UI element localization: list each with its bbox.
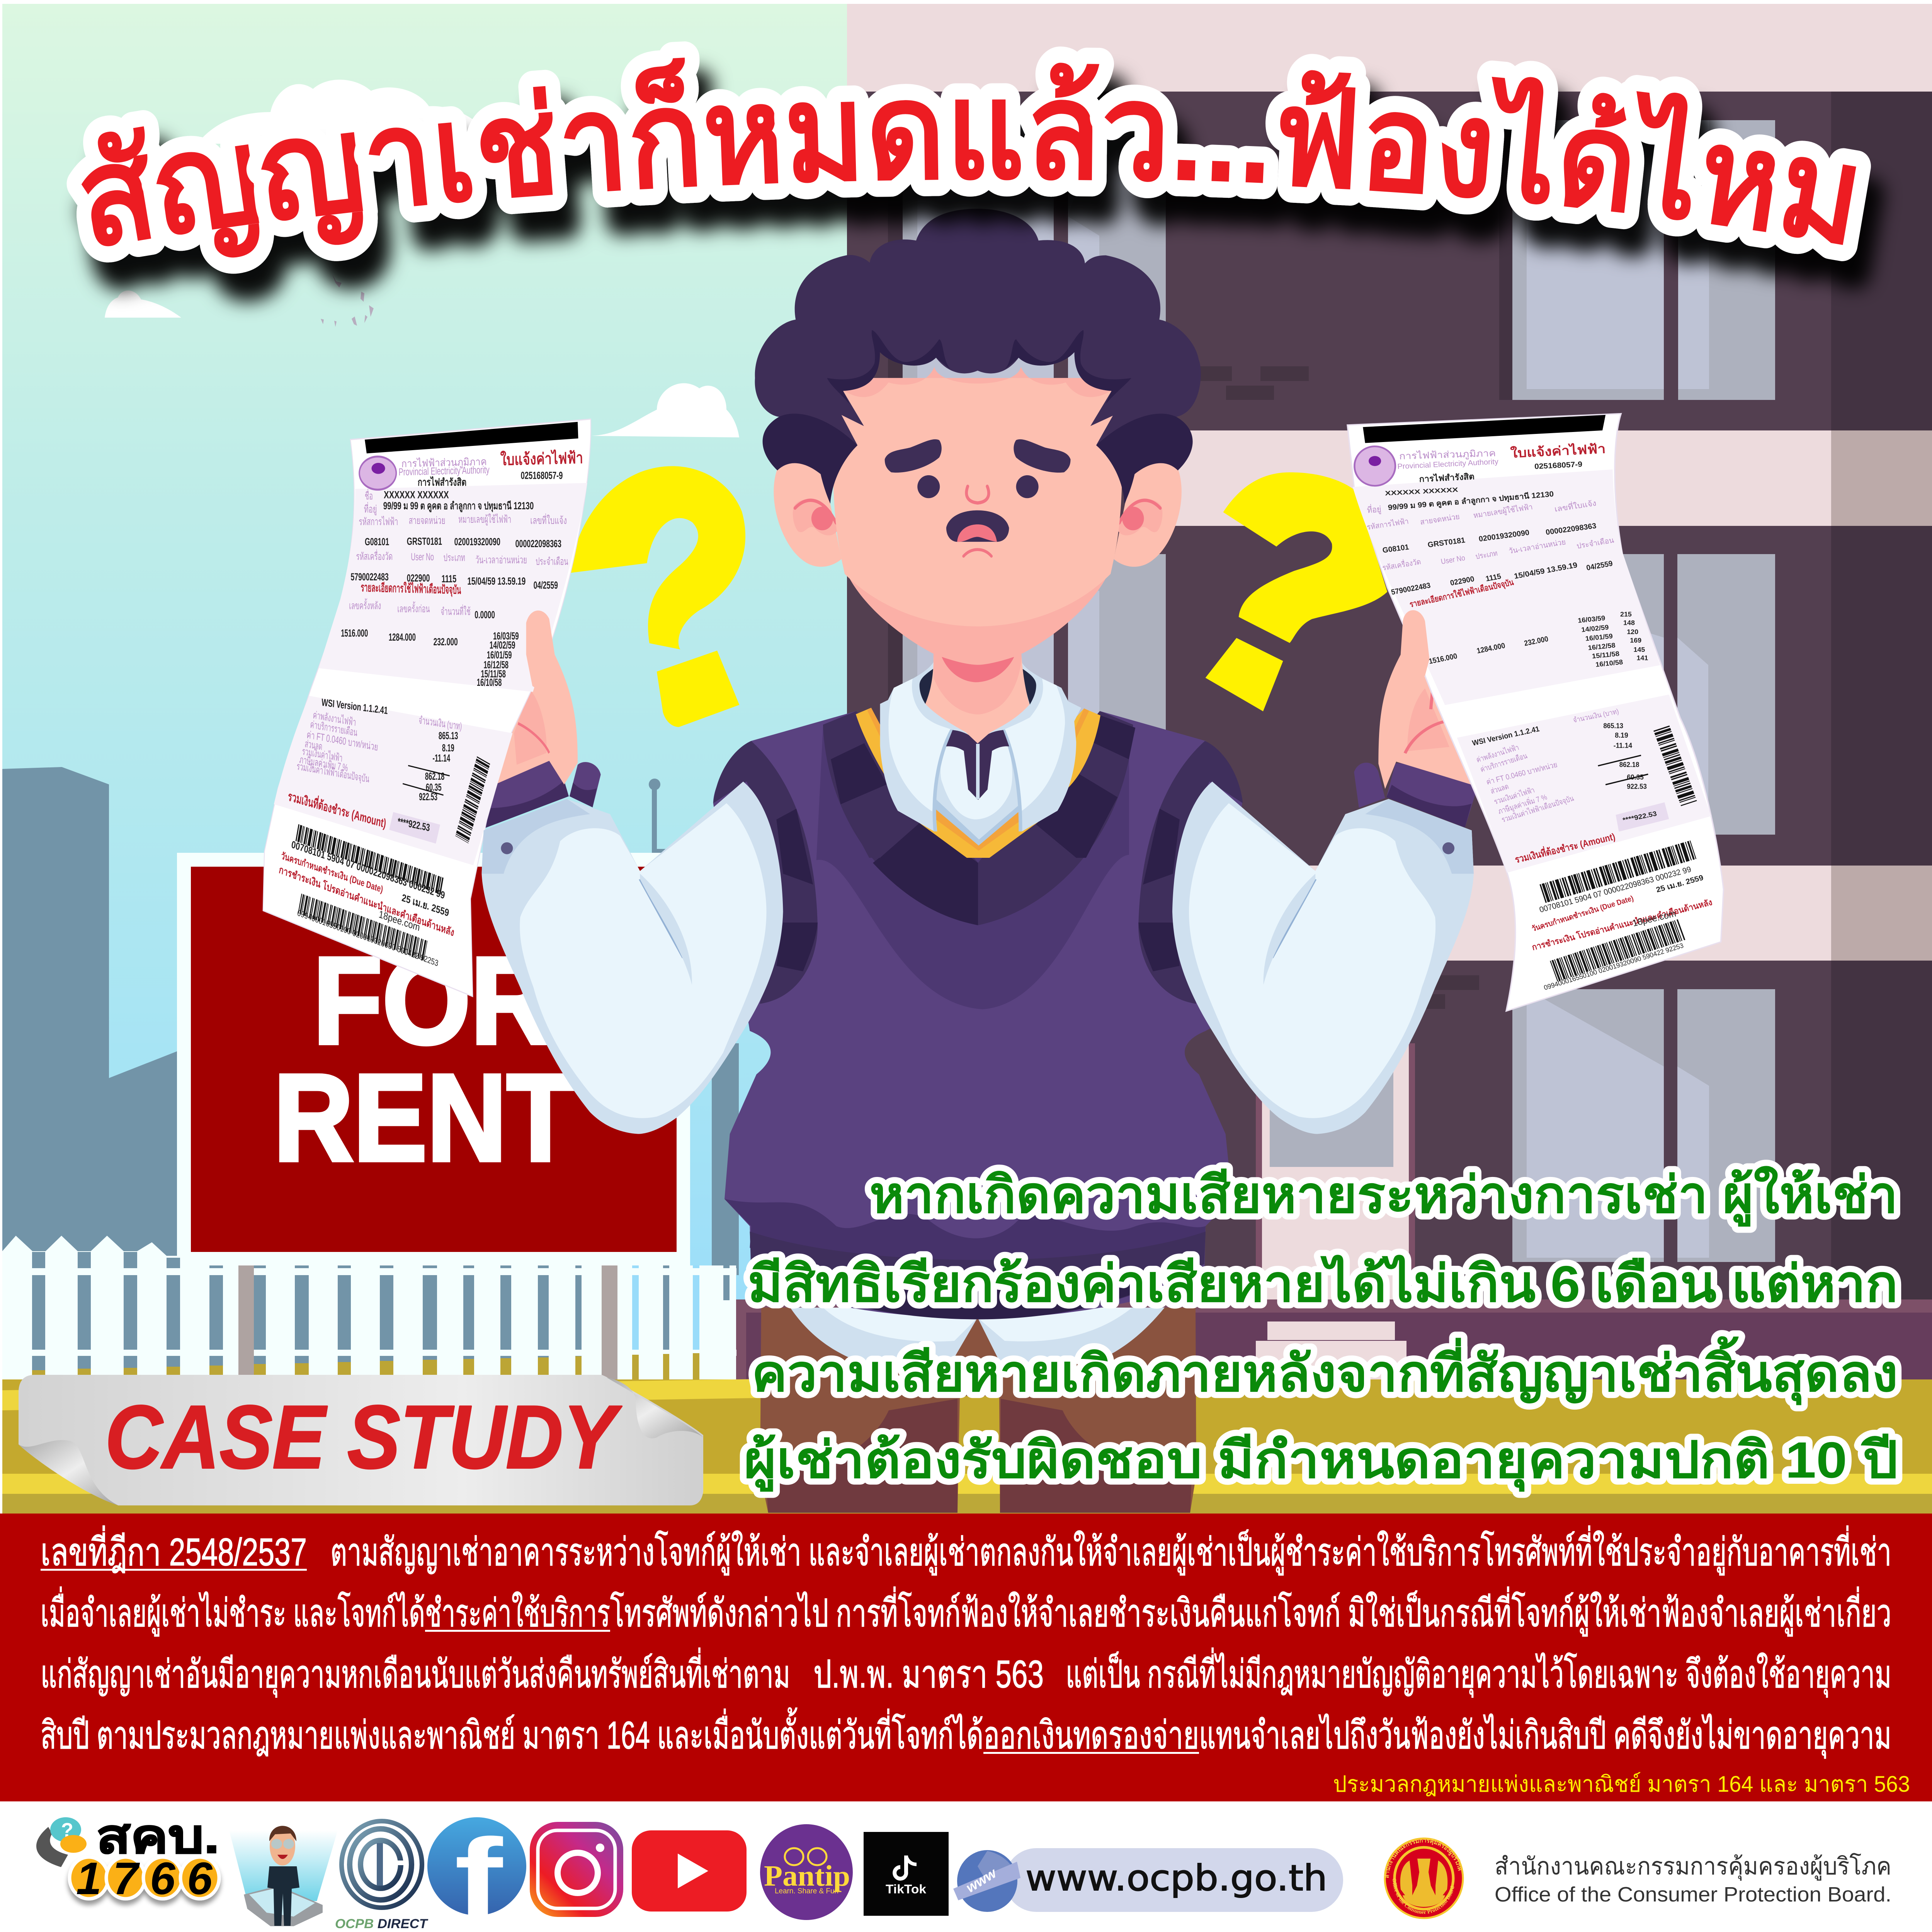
- right bill: charge details: ค่าพลังงานไฟฟ้า: [1475, 743, 1520, 764]
- hotline number: 7: [113, 1853, 140, 1904]
- left bill: charge details: ค่า FT 0.0460 บาท/หน่วย: [306, 729, 379, 753]
- man: left sleeve: [481, 782, 783, 1134]
- right bill: charge details: 922.53: [1627, 783, 1647, 791]
- building: windows: [888, 120, 1775, 1262]
- right bill: header text: สายจดหน่วย: [1420, 512, 1460, 527]
- vest stripes by collar: [831, 714, 1135, 858]
- right bill: header text: การไฟสำรังสิต: [1419, 471, 1475, 484]
- face: [833, 378, 1122, 626]
- footer icon: YouTube: [632, 1830, 747, 1912]
- legal text line 3: แก่สัญญาเช่าอันมีอายุความหกเดือนนับแต่วันส่งคืนทรัพย์สินที่เช่าตาม: [41, 1648, 790, 1698]
- left bill: header text: XXXXXX XXXXXX: [384, 489, 449, 501]
- man: trousers: [760, 1308, 1196, 1513]
- lamp post: [649, 779, 667, 854]
- left bill: header text: จำนวนที่ใช้: [441, 604, 471, 617]
- question mark: right: [1206, 472, 1387, 711]
- left thumb: [526, 611, 554, 702]
- left bill: charge details: WSI Version 1.1.2.41: [321, 696, 388, 716]
- necktie: [946, 730, 1009, 800]
- left bill: header text: 04/2559: [534, 579, 558, 591]
- left bill: charge details: -11.14: [432, 752, 450, 764]
- right bill: header text: 1516.000: [1428, 652, 1458, 666]
- left bill: charge details: ภาษีมูลค่าเพิ่ม 7 %: [299, 752, 349, 774]
- left bill: payment barcodes: วันครบกำหนดชำระเงิน (Due Date): [280, 851, 384, 895]
- left bill: header text: 232.000: [434, 636, 458, 648]
- right cuff: [1386, 763, 1478, 827]
- right bill: payment barcodes: วันครบกำหนดชำระเงิน (Due Date): [1531, 894, 1634, 933]
- left bill: header text: 16/12/58: [483, 659, 509, 670]
- building: bricks: [1199, 366, 1479, 1009]
- footer logo: OCPB direct: [335, 1821, 429, 1931]
- legal text line 4: สิบปี ตามประมวลกฎหมายแพ่งและพาณิชย์ มาตรา 164 และเมื่อนับตั้งแต่วันที่โจทก์ได้: [41, 1708, 983, 1757]
- left bill: header text: 1284.000: [389, 631, 416, 643]
- right bill: header text: 000022098363: [1545, 522, 1597, 537]
- ears: [774, 463, 842, 567]
- right bill: header text: 020019320090: [1478, 529, 1530, 543]
- right bill: payment barcodes: [1531, 850, 1713, 992]
- sign text: FOR: FOR: [313, 931, 553, 1070]
- right bill: charge details: 865.13: [1603, 722, 1623, 730]
- right bill: paper: [1347, 414, 1724, 1011]
- right bill: charge details: ภาษีมูลค่าเพิ่ม 7 %: [1497, 792, 1548, 816]
- right bill: vertical barcode: [1662, 728, 1689, 804]
- right bill: payment barcodes: 18pee.com: [1631, 908, 1677, 929]
- vest: centre shading: [816, 727, 1129, 1009]
- right bill: charge details: รวมเงินค่าไฟฟ้า: [1493, 786, 1536, 806]
- left bill: payment barcodes: [278, 833, 455, 969]
- right bill: header text: G08101: [1382, 543, 1410, 555]
- chat bubble: [60, 1835, 87, 1853]
- left bill: header text: การไฟสำรังสิต: [418, 476, 466, 488]
- man: neck, collar and necktie: [831, 657, 1135, 858]
- background: sky: [2, 4, 847, 1395]
- left bill: charge details: 922.53: [419, 791, 437, 803]
- right bill: header text: XXXXXX XXXXXX: [1385, 486, 1459, 497]
- globe: www: [963, 1864, 1000, 1896]
- right bill: header text: รายละเอียดการใช้ไฟฟ้าเดือนปัจจุบัน: [1408, 577, 1515, 610]
- right bill: header text: หมายเลขผู้ใช้ไฟฟ้า: [1473, 503, 1533, 520]
- left bill: header text: การไฟฟ้าส่วนภูมิภาค: [401, 456, 487, 470]
- left bill: header text: วัน-เวลาอ่านหน่วย: [475, 554, 527, 566]
- legal text line 1: เลขที่ฎีกา 2548/2537: [41, 1526, 307, 1574]
- emblem: ring text: Office of the Consumer Protection Board: [1391, 1878, 1456, 1915]
- left bill: header text: ใบแจ้งค่าไฟฟ้า: [500, 448, 583, 469]
- right bill: header text: รหัสการไฟฟ้า: [1366, 517, 1409, 532]
- legal text line 2: [41, 1587, 1891, 1636]
- legal text line 3: ป.พ.พ. มาตรา 563: [813, 1653, 1044, 1696]
- right bill: header text: รหัสเครื่องวัด: [1381, 556, 1422, 572]
- left bill: header text: ประเภท: [444, 551, 465, 563]
- left bill: charge details: จำนวนเงิน (บาท): [418, 714, 462, 732]
- hotline number: 6: [187, 1853, 213, 1904]
- right bill: charge details: จำนวนเงิน (บาท): [1572, 707, 1619, 724]
- question mark: left: [569, 466, 745, 727]
- legal text line 3: [41, 1648, 1891, 1698]
- left bill: header text: 1516.000: [341, 627, 368, 639]
- right bill: payment barcodes: การชำระเงิน โปรดอ่านคำแนะนำและคำเตือนด้านหลัง: [1531, 897, 1713, 952]
- left bill: header text: 16/10/58: [477, 677, 502, 688]
- footer: agency name: [1495, 1853, 1891, 1906]
- man: right hand holding electricity bill: [1347, 414, 1724, 1011]
- green summary text: มีสิทธิเรียกร้องค่าเสียหายได้ไม่เกิน 6 เดือน แต่หาก: [748, 1255, 1898, 1312]
- right bill: header text: 025168057-9: [1534, 460, 1583, 471]
- left bill: header text: รายละเอียดการใช้ไฟฟ้าเดือนปัจจุบัน: [361, 580, 461, 597]
- right bill: header text: 148: [1623, 619, 1635, 626]
- ground: [2, 1379, 1932, 1514]
- right bill: black bar: [1363, 415, 1605, 443]
- left bill: header text: รหัสการไฟฟ้า: [359, 516, 398, 527]
- jaw shadow: [842, 559, 1114, 653]
- left bill: header text: 020019320090: [454, 536, 500, 548]
- footer logo: Pantip: [760, 1824, 853, 1920]
- hotline number: [70, 1853, 219, 1904]
- left bill: charge details: 8.19: [442, 742, 454, 753]
- left bill: header text: ชื่อ: [365, 489, 373, 502]
- red legal panel: [0, 1514, 1932, 1801]
- left bill: paper: [263, 419, 591, 997]
- eyes: [917, 475, 940, 498]
- right bill: header text: 16/12/58: [1588, 641, 1616, 651]
- right bill: header text: 16/10/58: [1595, 658, 1623, 668]
- legal reference: ประมวลกฎหมายแพ่งและพาณิชย์ มาตรา 164 และ มาตรา 563: [1333, 1772, 1910, 1797]
- green summary text: ผู้เช่าต้องรับผิดชอบ มีกำหนดอายุความปกติ 10 ปี: [744, 1432, 1898, 1492]
- right bill: charge details: [1471, 707, 1648, 825]
- building: door: [1256, 1043, 1415, 1306]
- left bill: amount: [287, 787, 440, 844]
- man: right sleeve: [1172, 782, 1474, 1134]
- left bill: amount: ****922.53: [397, 815, 430, 833]
- left bill: charge details: รวมเงินค่าไฟฟ้า: [302, 745, 343, 764]
- left bill: header text: 022900: [407, 572, 430, 584]
- collar highlights: [888, 679, 952, 811]
- emblem: ring text: สำนักงานคณะกรรมการคุ้มครองผู้บริโภค: [1384, 1837, 1463, 1878]
- left bill: header text: หมายเลขผู้ใช้ไฟฟ้า: [458, 513, 511, 526]
- right bill: header text: ที่อยู่: [1367, 503, 1382, 515]
- right bill: header text: 16/03/59: [1577, 614, 1605, 624]
- building: facade: [719, 4, 1932, 1380]
- right palm: [1378, 610, 1471, 789]
- left bill: charge details: [296, 696, 462, 803]
- vest: V-neck: [823, 711, 1133, 925]
- footer logo: OCPB hotline 1766: [36, 1810, 219, 1904]
- right bill: charge details: ค่าบริการรายเดือน: [1479, 752, 1529, 774]
- case study paper banner: [19, 1375, 703, 1505]
- left bill: header text: สายจดหน่วย: [409, 515, 445, 526]
- yellow trim: [856, 708, 1100, 858]
- left bill: charge details: รวมเงินค่าไฟฟ้าเดือนปัจจุบัน: [296, 760, 370, 785]
- hotline number: 6: [150, 1853, 176, 1904]
- right bill: header text: 15/11/58: [1592, 650, 1620, 660]
- right bill: charge details: -11.14: [1614, 742, 1632, 750]
- left bill: charge details: ค่าบริการรายเดือน: [310, 718, 358, 738]
- right bill: header text: เลขที่ใบแจ้ง: [1554, 498, 1597, 514]
- legal text line 4: [41, 1708, 1891, 1759]
- left bill: charge details: ค่าพลังงานไฟฟ้า: [313, 709, 357, 728]
- neck shadow: [942, 657, 1014, 682]
- left bill: header text: G08101: [365, 536, 389, 548]
- left bill: payment barcodes: 099400016550100 020019320090 590422 92253: [297, 908, 439, 969]
- right bill: payment barcodes: 099400016550100 020019320090 590422 92253: [1543, 942, 1684, 992]
- left bill: amount: รวมเงินที่ต้องชำระ (Amount): [287, 787, 387, 830]
- legal text line 4: ออกเงินทดรองจ่าย: [983, 1714, 1199, 1757]
- footer logo: TikTok: TikTok: [886, 1882, 926, 1896]
- left bill: header text: 15/11/58: [481, 668, 506, 680]
- left bill: charge details: 862.18: [425, 770, 444, 782]
- left bill: header text: Provincial Electricity Authority: [398, 464, 490, 478]
- right bill: header text: 169: [1630, 636, 1641, 644]
- left bill: payment barcodes: 25 เม.ย. 2559: [401, 891, 450, 919]
- neck top: [934, 650, 1022, 665]
- right bill: charge details: รวมเงินค่าไฟฟ้าเดือนปัจจุบัน: [1500, 794, 1575, 825]
- right bill: header text: 15/04/59 13.59.19: [1513, 561, 1578, 581]
- legal text line 2: เมื่อจำเลยผู้เช่าไม่ชำระ และโจทก์ได้: [41, 1587, 425, 1636]
- footer: website pill: [953, 1848, 1343, 1912]
- right bill: header text: 215: [1620, 611, 1632, 618]
- left bill: header text: GRST0181: [407, 536, 442, 547]
- left bill: header text: ประจำเดือน: [536, 556, 568, 567]
- right bill: header text: 16/01/59: [1585, 632, 1613, 642]
- left bill: charge details: ส่วนลด: [304, 738, 323, 752]
- left bill: payment barcodes: การชำระเงิน โปรดอ่านคำแนะนำและคำเตือนด้านหลัง: [278, 863, 455, 938]
- left bill: header text: เลขครั้งก่อน: [397, 602, 430, 614]
- right bill: amount: รวมเงินที่ต้องชำระ (Amount): [1514, 830, 1616, 865]
- left bill: header text: 0.0000: [474, 609, 495, 621]
- right bill: charge details: ค่า FT 0.0460 บาท/หน่วย: [1485, 760, 1558, 786]
- legal text line 2: ชำระค่าใช้บริการ: [425, 1592, 610, 1635]
- right bill: header text: 1115: [1485, 572, 1502, 583]
- left bill: header text: [341, 448, 583, 688]
- right bill: charge details: ส่วนลด: [1490, 782, 1510, 796]
- forehead shadow: [843, 367, 1112, 397]
- left bill: header text: รหัสเครื่องวัด: [356, 549, 393, 562]
- right bill: header text: Provincial Electricity Authority: [1397, 457, 1498, 471]
- shirt front: [940, 746, 1012, 820]
- left bill: header text: 16/01/59: [487, 649, 512, 661]
- right bill: header text: ประจำเดือน: [1576, 536, 1615, 551]
- left bill: header text: 14/02/59: [490, 639, 515, 651]
- man: shirt tail: [790, 1308, 1165, 1364]
- footer: government emblem: [1384, 1837, 1463, 1918]
- left bill: header text: 16/03/59: [493, 630, 519, 642]
- left bill: header text: 1115: [442, 573, 457, 585]
- right bill: header text: 120: [1627, 628, 1638, 636]
- right bill: header text: ประเภท: [1475, 549, 1498, 561]
- right bill: header text: User No: [1440, 554, 1466, 566]
- emblem: ring text: [1384, 1837, 1463, 1915]
- right bill: header text: 99/99 ม 99 ต คูคต อ ลำลูกกา จ ปทุมธานี 12130: [1388, 490, 1554, 513]
- left palm: [495, 611, 578, 784]
- man: vest: [713, 711, 1243, 1319]
- right bill: payment barcodes: 25 เม.ย. 2559: [1655, 874, 1704, 894]
- left bill: header text: เลขที่ใบแจ้ง: [530, 513, 567, 526]
- emblem: pedestal and guardians: [1400, 1859, 1447, 1907]
- globe: [953, 1850, 1020, 1912]
- for rent sign: [177, 853, 690, 1270]
- question bubble: ?: [61, 1819, 73, 1842]
- left bill: black bar: [365, 422, 578, 453]
- right bill: logo: [1354, 446, 1395, 486]
- sign text: RENT: RENT: [274, 1048, 574, 1187]
- right bill: header text: ใบแจ้งค่าไฟฟ้า: [1510, 441, 1606, 461]
- footer icon: Facebook: [427, 1816, 526, 1932]
- main title: สัญญาเช่าก็หมดแล้ว...ฟ้องได้ไหม: [67, 55, 1874, 276]
- right bill: charge details: 8.19: [1615, 732, 1628, 740]
- footer logo: Pantip: Pantip: [764, 1860, 850, 1892]
- distant column right of sign: [712, 1043, 739, 1275]
- white picket fence: [2, 1236, 736, 1379]
- left bill: header text: 15/04/59 13.59.19: [467, 575, 526, 587]
- distant grey-blue building: [2, 767, 178, 1314]
- left bill: logo: [359, 457, 396, 490]
- right bill: payment barcodes: 00708101 5904 07 000022098363 000232 99: [1538, 865, 1692, 914]
- agency name: สคบ.: [96, 1810, 219, 1863]
- man: head: [755, 209, 1201, 665]
- left bill: charge details: 865.13: [439, 730, 458, 742]
- right bill: header text: 145: [1633, 646, 1645, 653]
- footer: OCPB direct presenter: [229, 1826, 338, 1926]
- right bill: header text: การไฟฟ้าส่วนภูมิภาค: [1399, 448, 1496, 462]
- website address: www.ocpb.go.th: [1026, 1857, 1327, 1899]
- left bill: charge details: 60.35: [426, 781, 442, 793]
- sideburns: [763, 413, 857, 504]
- green summary text: [744, 1166, 1898, 1492]
- footer: agency name: Office of the Consumer Protection Board.: [1495, 1883, 1891, 1906]
- right bill: header text: 5790022483: [1390, 581, 1431, 597]
- left bill: header text: ที่อยู่: [364, 502, 377, 515]
- vest: armholes: [713, 741, 818, 1004]
- right bill: header text: 141: [1636, 654, 1648, 662]
- left bill: vertical barcode: [462, 760, 483, 840]
- shirt collar: [880, 657, 1081, 842]
- right bill: header text: [1366, 441, 1648, 668]
- eyebrows: [885, 439, 942, 473]
- building: pink bands: [1151, 430, 1831, 961]
- building: plinth and steps: [719, 1299, 1932, 1380]
- right bill: header text: 022900: [1449, 575, 1475, 587]
- collar interior: [920, 668, 1036, 704]
- orange trim: [867, 708, 1089, 851]
- right bill: header text: 1284.000: [1476, 641, 1506, 655]
- case study text: CASE STUDY: [105, 1387, 622, 1487]
- phone icon: [36, 1827, 68, 1867]
- footer logo: TikTok: [864, 1832, 949, 1916]
- footer logo: Pantip: Learn. Share & Fun: [775, 1887, 838, 1895]
- left bill: header text: 025168057-9: [521, 469, 563, 481]
- left bill: header text: เลขครั้งหลัง: [349, 598, 381, 611]
- right thumb: [1403, 610, 1429, 680]
- right bill: amount: ****922.53: [1622, 810, 1658, 824]
- hotline number: 1: [76, 1853, 102, 1904]
- right bill: header text: 04/2559: [1586, 560, 1614, 572]
- right bill: header text: GRST0181: [1427, 536, 1466, 549]
- left bill: header text: 5790022483: [350, 571, 389, 583]
- left bill: payment barcodes: 18pee.com: [378, 908, 421, 933]
- question bubble: [50, 1817, 81, 1842]
- left cuff: [485, 761, 569, 828]
- green summary text: ความเสียหายเกิดภายหลังจากที่สัญญาเช่าสิ้นสุดลง: [752, 1336, 1898, 1405]
- left bill: payment barcodes: 00708101 5904 07 000022098363 000232 99: [291, 838, 446, 901]
- birds: [321, 274, 374, 327]
- left bill: header text: 99/99 ม 99 ต คูคต อ ลำลูกกา จ ปทุมธานี 12130: [383, 500, 534, 512]
- right bill: amount: [1514, 802, 1669, 865]
- mouth: [946, 510, 1009, 542]
- left bill: header text: 000022098363: [515, 538, 561, 549]
- right bill: charge details: 862.18: [1619, 761, 1639, 769]
- clouds: [105, 80, 739, 437]
- neck: [925, 657, 1029, 743]
- green summary text: หากเกิดความเสียหายระหว่างการเช่า ผู้ให้เช่า: [869, 1166, 1898, 1227]
- OCPB direct caption: OCPB DIRECT: [335, 1917, 429, 1931]
- hair: [755, 209, 1201, 445]
- footer icon: Instagram: [530, 1822, 623, 1917]
- man: left hand holding electricity bill: [263, 419, 601, 997]
- nose: [966, 486, 989, 503]
- hair: dark curls: [827, 330, 952, 404]
- right bill: header text: วัน-เวลาอ่านหน่วย: [1508, 538, 1566, 556]
- left bill: header text: User No: [411, 551, 434, 563]
- right bill: charge details: 60.35: [1627, 774, 1644, 782]
- footer: agency name: สำนักงานคณะกรรมการคุ้มครองผู้บริโภค: [1495, 1853, 1891, 1881]
- right bill: header text: 232.000: [1524, 635, 1549, 648]
- right bill: header text: 14/02/59: [1581, 623, 1609, 634]
- right bill: charge details: WSI Version 1.1.2.41: [1471, 725, 1540, 748]
